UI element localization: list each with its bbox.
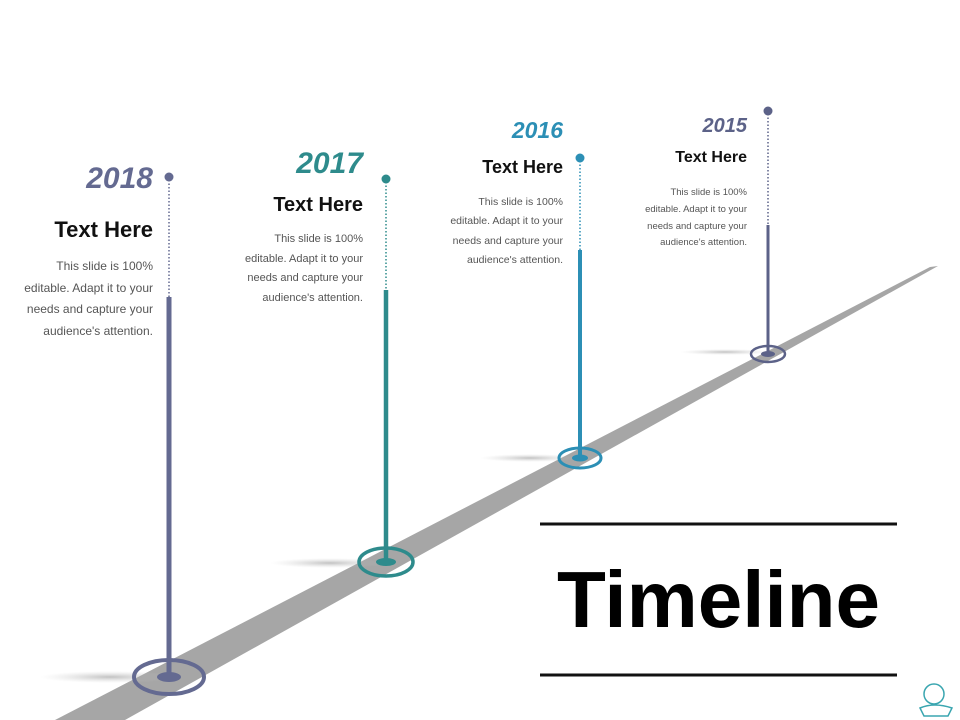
text 2015	[645, 115, 748, 248]
text 2015: needs and capture your	[647, 221, 747, 232]
text 2018: editable. Adapt it to your	[24, 281, 153, 295]
text 2018: 2018	[86, 162, 153, 195]
text 2015: This slide is 100%	[670, 187, 747, 198]
text 2018: needs and capture your	[27, 302, 153, 316]
pin 2018	[134, 172, 204, 694]
pin 2015	[751, 106, 785, 362]
text 2016: This slide is 100%	[478, 196, 563, 208]
text 2018	[24, 162, 153, 338]
title rules	[540, 524, 897, 675]
text 2015: editable. Adapt it to your	[645, 204, 747, 215]
text 2018: Text Here	[54, 217, 153, 242]
text 2015: audience's attention.	[660, 237, 747, 248]
text 2017: audience's attention.	[262, 292, 363, 304]
text 2016: needs and capture your	[453, 235, 563, 247]
text 2016	[450, 117, 564, 266]
text 2017: 2017	[296, 147, 363, 180]
text 2017: needs and capture your	[247, 272, 363, 284]
text 2015: Text Here	[675, 149, 747, 166]
pin 2016	[559, 154, 601, 468]
text 2015: 2015	[702, 115, 747, 137]
title: Timeline	[557, 555, 880, 644]
text 2016: Text Here	[482, 157, 563, 177]
text 2017: This slide is 100%	[274, 233, 363, 245]
text 2018: This slide is 100%	[56, 259, 153, 273]
text 2018: audience's attention.	[43, 324, 153, 338]
shadows	[40, 349, 770, 683]
text 2017: editable. Adapt it to your	[245, 252, 363, 264]
text 2016: 2016	[512, 117, 563, 143]
text 2017: Text Here	[273, 194, 363, 216]
text 2017	[245, 147, 364, 304]
text 2016: audience's attention.	[467, 254, 563, 266]
road	[55, 266, 938, 720]
text 2016: editable. Adapt it to your	[450, 215, 563, 227]
logo icon	[920, 684, 952, 716]
pin 2017	[359, 174, 413, 576]
